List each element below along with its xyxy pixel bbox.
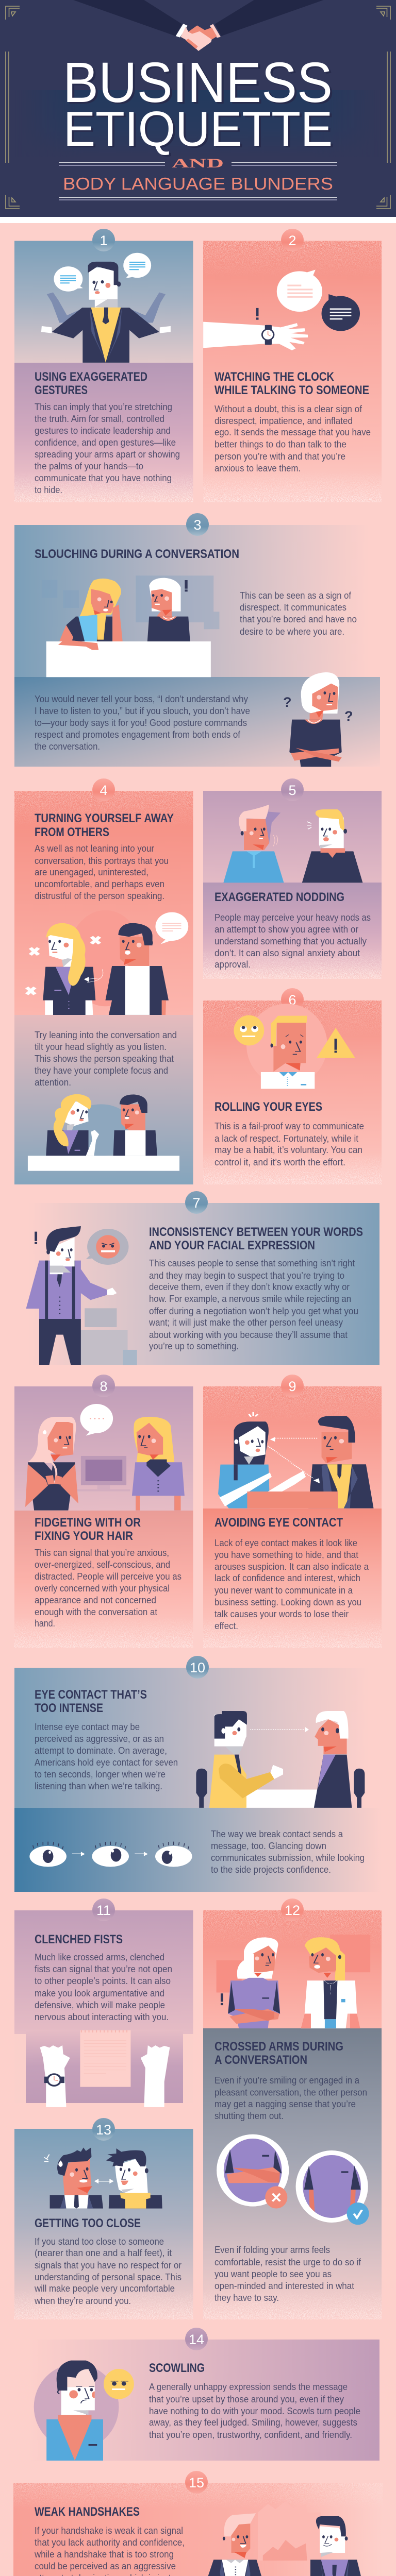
body text: have nothing to do with your mood. Scowls turn people — [149, 2406, 360, 2416]
panel: 2 watching the clock — [203, 229, 382, 502]
body text — [35, 1722, 178, 1791]
body text lower: the conversation. — [35, 741, 100, 752]
body text — [35, 1952, 172, 2022]
body text: spreading your arms apart or showing — [35, 449, 180, 460]
badge 2: 2 — [288, 233, 296, 248]
body text — [35, 402, 180, 495]
heading — [35, 1516, 141, 1543]
illustration: turned-away pair — [27, 910, 188, 1015]
body text: that you lack authority and confidence, — [35, 2537, 185, 2548]
illustration: two women at desk — [42, 575, 219, 677]
body text: talk causes your words to lose their — [214, 1609, 349, 1619]
body text: Lack of eye contact makes it look like — [214, 1538, 357, 1548]
body text: to hide. — [35, 485, 62, 495]
heading: FIDGETING WITH OR — [35, 1516, 141, 1530]
body text — [214, 2075, 367, 2121]
body text: may be a habit, it’s voluntary. You can — [214, 1145, 362, 1155]
panel: 3 slouching — [14, 513, 380, 767]
body text: arouses suspicion. It can also indicate a — [214, 1562, 369, 1572]
panel: 12 crossed arms — [203, 1899, 382, 2319]
body text: pleasant conversation, the other person — [214, 2088, 367, 2098]
body text: nervous about interacting with you. — [35, 2012, 169, 2022]
badge 3 — [186, 513, 209, 536]
heading: FROM OTHERS — [35, 825, 109, 839]
body text lower: Even if folding your arms feels — [214, 2245, 330, 2255]
body text — [214, 1538, 369, 1631]
heading: WHILE TALKING TO SOMEONE — [214, 383, 369, 397]
body text: when they’re around you. — [34, 2296, 131, 2306]
badge 7 — [185, 1191, 208, 1214]
badge 5: 5 — [288, 783, 296, 798]
heading: EXAGGERATED NODDING — [214, 890, 344, 904]
body text: listening than when we’re talking. — [35, 1781, 162, 1791]
heading — [214, 370, 369, 397]
illustration: clenched fists on table — [26, 2030, 183, 2107]
body text lower: to—your body says it for you! Good posture commands — [35, 718, 247, 728]
body text lower — [35, 694, 250, 752]
body text: communicate that you have nothing — [35, 473, 172, 483]
badge 10 — [186, 1656, 209, 1679]
body text: how. For example, a nervous smile while rejecting an — [149, 1294, 351, 1304]
illustration: two women with crossed arms — [217, 1935, 370, 2028]
body text: lack of confidence and interest, which — [214, 1573, 360, 1583]
badge 8: 8 — [100, 1379, 108, 1394]
illustration: handshake at desk — [197, 2501, 377, 2576]
badge 14 — [185, 2328, 208, 2350]
body text: don’t. It can also signal anxiety about — [214, 948, 360, 958]
body text: you never want to communicate in a — [214, 1585, 353, 1596]
body text: hand. — [35, 1618, 55, 1629]
body text lower: they have your complete focus and — [35, 1065, 168, 1076]
badge 15: 15 — [189, 2475, 204, 2490]
body text: Americans hold eye contact for seven — [35, 1757, 178, 1768]
body text lower — [211, 1829, 365, 1875]
heading: TURNING YOURSELF AWAY — [35, 811, 174, 825]
heading: GESTURES — [35, 383, 88, 397]
body text: This can signal that you’re anxious, — [35, 1548, 169, 1558]
title: BUSINESS — [63, 51, 333, 114]
body text: offer during a negotiation won’t help you get what you — [149, 1306, 358, 1316]
body text: Even if you’re smiling or engaged in a — [214, 2075, 360, 2086]
body text — [214, 912, 371, 970]
body text: better things to do than talk to the — [214, 439, 346, 449]
title — [63, 51, 333, 157]
heading: AVOIDING EYE CONTACT — [214, 1516, 343, 1530]
body text: understanding of personal space. This — [35, 2272, 182, 2282]
illustration: gesturing man — [41, 253, 171, 363]
question marks: ? — [283, 694, 292, 710]
body text lower: This shows the person speaking that — [35, 1054, 174, 1064]
body text: anxious to leave them. — [214, 463, 301, 473]
body text right: This can be seen as a sign of — [240, 590, 352, 601]
badge 5 — [281, 778, 304, 801]
badge 13 — [92, 2118, 115, 2141]
body text lower — [35, 1030, 177, 1088]
body text: This can imply that you’re stretching — [35, 402, 172, 412]
body text lower: You would never tell your boss, “I don’t understand why — [35, 694, 248, 704]
body text lower: comfortable, resist the urge to do so if — [214, 2257, 361, 2267]
body text: confidence, and open gestures—like — [35, 437, 176, 448]
body text lower: respect and promotes engagement from both ends of — [35, 730, 241, 740]
panel: 14 scowling — [28, 2328, 380, 2461]
body text lower: The way we break contact sends a — [211, 1829, 343, 1839]
panel: 11 clenched fists — [14, 1899, 193, 2107]
question marks — [283, 694, 353, 724]
badge 2 — [281, 229, 304, 251]
badge 1: 1 — [100, 233, 108, 248]
illustration: man with mismatched expression — [26, 1226, 137, 1365]
heading: ROLLING YOUR EYES — [214, 1100, 322, 1114]
heading: WATCHING THE CLOCK — [214, 370, 335, 384]
illustration: engaged pair at desk — [28, 1094, 179, 1171]
body text: This is a fail-proof way to communicate — [214, 1121, 364, 1131]
body text lower: attention. — [35, 1077, 71, 1088]
question marks: ? — [344, 708, 353, 724]
body text: overly concerned with your physical — [35, 1583, 170, 1594]
badge 15 — [185, 2471, 208, 2494]
body text: fists can signal that you’re not open — [35, 1964, 172, 1974]
body text: you’re up to something. — [149, 1341, 239, 1351]
subtitle: BODY LANGUAGE BLUNDERS — [63, 174, 333, 193]
heading: SCOWLING — [149, 2361, 205, 2375]
body text lower: tilt your head slightly as you listen. — [35, 1042, 167, 1052]
heading: WEAK HANDSHAKES — [35, 2505, 140, 2519]
heading: CLENCHED FISTS — [35, 1933, 123, 1946]
body text: the truth. Aim for small, controlled — [35, 414, 164, 424]
badge 10: 10 — [190, 1660, 205, 1675]
body text: will make people very uncomfortable — [34, 2283, 175, 2294]
body text: defensive, which will make people — [35, 2000, 165, 2010]
body text: make you look argumentative and — [35, 1988, 164, 1998]
illustration: right and wrong posture — [217, 2134, 369, 2225]
heading: FIXING YOUR HAIR — [35, 1529, 133, 1543]
body text — [35, 1548, 182, 1629]
badge 6 — [281, 988, 304, 1011]
body text: to ten seconds, longer when we’re — [35, 1769, 166, 1780]
header — [0, 0, 396, 223]
body text: (nearer than one and a half feet), it — [35, 2248, 172, 2258]
body text: signals that you have no respect for or — [35, 2260, 182, 2270]
body text: may get a nagging sense that you’re — [214, 2099, 356, 2109]
illustration: woman with crossed arms — [289, 672, 342, 767]
heading: TOO INTENSE — [35, 1701, 103, 1715]
body text: that you’re open, trustworthy, confident, and friendly. — [149, 2430, 352, 2440]
body text: enough with the conversation at — [35, 1607, 157, 1617]
body text: understand something that you actually — [214, 936, 367, 946]
body text: Much like crossed arms, clenched — [35, 1952, 164, 1962]
body text: Without a doubt, this is a clear sign of — [214, 404, 362, 414]
and: AND — [172, 157, 224, 171]
body text right: desire to be where you are. — [240, 626, 344, 637]
illustration: wristwatch and bubbles — [203, 270, 360, 350]
illustration: staring pair at table — [196, 1711, 365, 1808]
body text: If you stand too close to someone — [35, 2236, 164, 2247]
heading: GETTING TOO CLOSE — [35, 2216, 141, 2230]
badge 14: 14 — [189, 2332, 204, 2347]
body text — [34, 2236, 182, 2306]
body text: Intense eye contact may be — [35, 1722, 140, 1732]
body text lower: to the side projects confidence. — [211, 1865, 331, 1875]
body text: appearance and not concerned — [35, 1595, 156, 1605]
badge 11 — [92, 1899, 115, 1921]
body text: that you’re upset by those around you, even if they — [149, 2394, 344, 2404]
illustration: scowling man — [34, 2361, 134, 2461]
body text: you have something to hide, and that — [214, 1550, 358, 1560]
body text: effect. — [214, 1621, 238, 1631]
body text: over-energized, self-conscious, and — [35, 1560, 170, 1570]
heading: AND YOUR FACIAL EXPRESSION — [149, 1239, 315, 1252]
body text lower: message, too. Glancing down — [211, 1841, 326, 1851]
badge 6: 6 — [288, 992, 296, 1008]
body text: distrustful of the person speaking. — [35, 891, 164, 901]
badge 13: 13 — [96, 2122, 111, 2138]
body text — [149, 2382, 360, 2440]
body text — [34, 2526, 186, 2576]
panel: 8 fidgeting — [14, 1375, 193, 1648]
body text: People may perceive your heavy nods as — [214, 912, 371, 923]
body text lower: open-minded and interested in what — [214, 2281, 354, 2291]
panel: 9 avoiding eye contact — [203, 1375, 382, 1648]
body text: conversation, this portrays that you — [35, 856, 169, 866]
panel: 7 inconsistency — [26, 1191, 380, 1365]
panel: 13 getting too close — [14, 2118, 193, 2319]
body text: gestures to indicate leadership and — [35, 426, 171, 436]
body text: If your handshake is weak it can signal — [35, 2526, 183, 2536]
panel: 5 exaggerated nodding — [203, 778, 382, 979]
body text: person you’re with and that you’re — [214, 451, 345, 462]
illustration: avoiding gaze — [218, 1412, 374, 1509]
body text lower — [214, 2245, 361, 2303]
body text: want; it will just make the other person feel uneasy — [148, 1317, 343, 1328]
heading: EYE CONTACT THAT’S — [35, 1688, 147, 1702]
illustration: eye-rolling man — [234, 1004, 355, 1089]
body text: ego. It sends the message that you have — [214, 427, 371, 437]
illustration: eye movement sequence — [29, 1842, 192, 1867]
heading: USING EXAGGERATED — [35, 370, 147, 384]
body text — [35, 843, 169, 901]
badge 8 — [92, 1375, 115, 1397]
body text — [214, 1121, 364, 1167]
badge 9 — [281, 1375, 304, 1397]
body text: uncomfortable, and perhaps even — [35, 879, 164, 889]
body text: A generally unhappy expression sends the message — [149, 2382, 348, 2392]
illustration: hair-fidgeting pair — [25, 1404, 185, 1511]
heading — [35, 1688, 147, 1715]
badge 3: 3 — [193, 517, 202, 533]
body text: could be perceived as an aggressive — [35, 2561, 176, 2571]
icon: handshake — [73, 0, 323, 51]
heading — [149, 1225, 363, 1252]
badge 7: 7 — [192, 1195, 201, 1211]
body text right: that you’re bored and have no — [240, 614, 357, 624]
body text — [148, 1258, 358, 1351]
body text lower: they have to say. — [214, 2293, 279, 2303]
heading — [214, 2040, 343, 2067]
heading — [35, 370, 147, 397]
panel: 1 using exaggerated gestures — [14, 229, 193, 502]
panel: 15 weak handshakes — [13, 2471, 383, 2576]
body text lower: I have to listen to you,” but if you slouch, you don’t have — [35, 706, 250, 716]
panel: 4 turning away — [14, 778, 193, 1184]
body text: control it, and it’s worth the effort. — [214, 1157, 345, 1167]
title: ETIQUETTE — [63, 101, 333, 157]
body text: deceive them, even if they don’t know exactly why or — [149, 1282, 350, 1292]
badge 9: 9 — [288, 1379, 296, 1394]
heading: CROSSED ARMS DURING — [214, 2040, 343, 2054]
body text right — [240, 590, 357, 637]
body text lower: communicates submission, while looking — [211, 1853, 365, 1863]
badge 12: 12 — [285, 1903, 300, 1918]
badge 4: 4 — [100, 783, 108, 798]
body text: As well as not leaning into your — [35, 843, 154, 854]
heading: SLOUCHING DURING A CONVERSATION — [35, 547, 239, 561]
body text: while a handshake that is too strong — [34, 2549, 174, 2560]
body text — [214, 404, 371, 473]
body text: and they may begin to suspect that you’re trying to — [149, 1270, 344, 1281]
body text right: disrespect. It communicates — [240, 602, 346, 613]
body text: perceived as aggressive, or as an — [35, 1734, 164, 1744]
illustration: nodding pair — [223, 805, 362, 883]
body text: away, as they feel judged. Smiling, however, suggests — [149, 2417, 357, 2428]
badge 4 — [92, 778, 115, 801]
body text: This causes people to sense that something isn’t right — [149, 1258, 355, 1268]
body text: distracted. People will perceive you as — [35, 1571, 182, 1582]
badge 12 — [281, 1899, 304, 1921]
heading: A CONVERSATION — [214, 2053, 307, 2067]
subtitle rules — [59, 162, 337, 200]
badge 11: 11 — [96, 1903, 111, 1918]
heading — [35, 811, 174, 839]
body text: to other people’s points. It can also — [35, 1976, 171, 1986]
body text: shutting them out. — [214, 2111, 284, 2121]
panel: 10 intense eye contact — [14, 1656, 382, 1892]
body text: the palms of your hands—to — [35, 461, 143, 471]
body text: about working with you because they’ll assume that — [149, 1330, 348, 1340]
panel: 6 rolling your eyes — [203, 988, 382, 1184]
body text: an attempt to show you agree with or — [214, 924, 358, 935]
body text: disrespect, impatience, and inflated — [214, 416, 353, 426]
body text lower: you want people to see you as — [214, 2269, 332, 2279]
badge 1 — [92, 229, 115, 251]
body text: attempt to dominate. On average, — [35, 1745, 167, 1756]
corner ornaments — [6, 6, 390, 209]
body text: approval. — [214, 959, 251, 970]
illustration: men too close — [44, 2147, 162, 2209]
body text lower: Try leaning into the conversation and — [35, 1030, 177, 1040]
body text: a lack of respect. Fortunately, while it — [214, 1133, 358, 1144]
body text: are unengaged, uninterested, — [35, 867, 148, 877]
body text: business setting. Looking down as you — [214, 1597, 361, 1607]
